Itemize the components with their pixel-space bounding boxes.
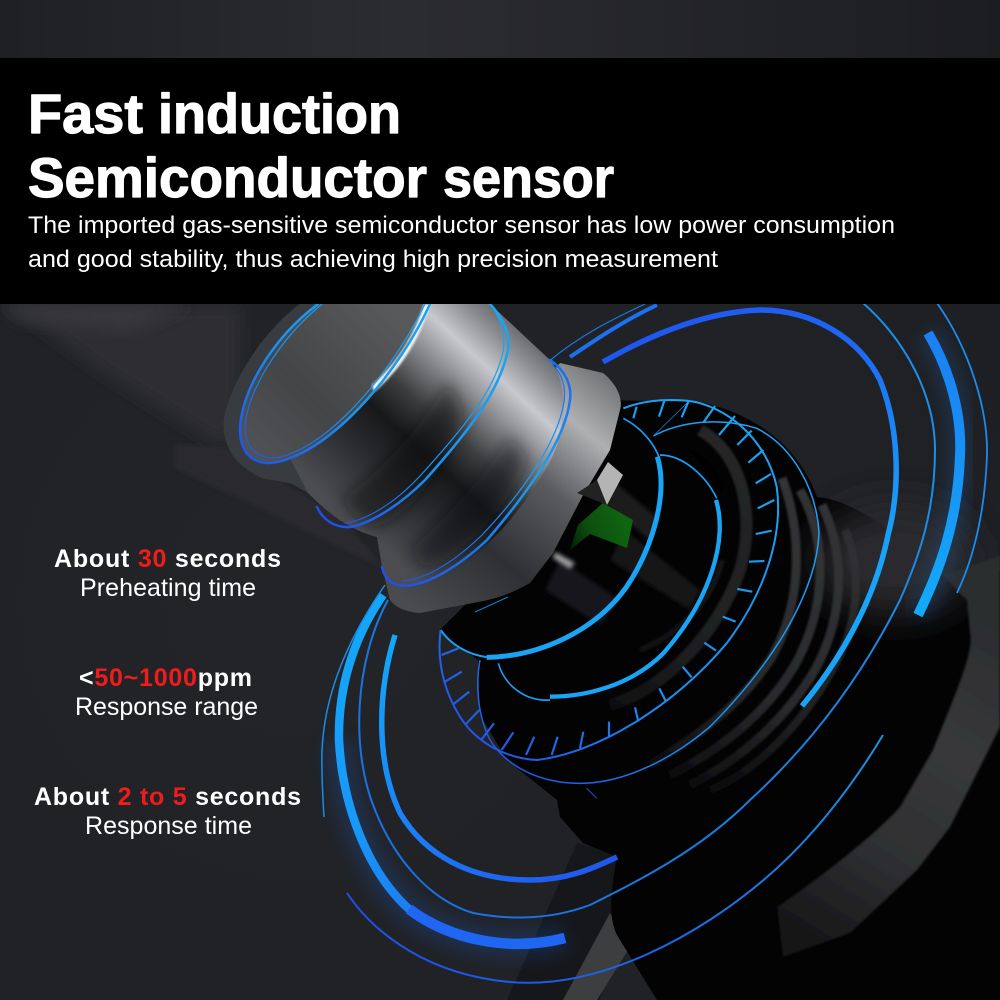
arc long bottom bbox=[347, 735, 883, 983]
main cylinder bbox=[224, 304, 564, 586]
spec: response time bbox=[34, 783, 301, 840]
arc lower thick bbox=[339, 595, 410, 910]
blue housing rings bbox=[240, 304, 570, 586]
translucent left rim bbox=[224, 304, 318, 493]
white rim highlight bbox=[372, 304, 430, 392]
description: The imported gas-sensitive semiconductor sensor has low power consumption bbox=[28, 212, 895, 239]
collar bbox=[382, 363, 621, 613]
arc lower thin left bbox=[322, 585, 385, 817]
ring 3 bbox=[382, 360, 570, 586]
small scan line bbox=[475, 597, 508, 612]
green circuit board bbox=[570, 503, 633, 550]
glow: lower thick arc bbox=[339, 740, 565, 944]
spec: response range bbox=[75, 664, 258, 721]
title: Fast bbox=[28, 82, 143, 145]
spec: preheating time: Preheating time bbox=[80, 574, 256, 602]
arc upper thick short bbox=[570, 305, 657, 357]
title: sensor bbox=[443, 146, 614, 209]
ring 1 bbox=[240, 304, 430, 463]
black title banner bbox=[0, 58, 1000, 304]
title bbox=[28, 82, 614, 209]
shaded lobes bbox=[340, 380, 465, 528]
long thin spiral bbox=[359, 303, 935, 918]
front face bbox=[240, 304, 430, 463]
title: induction bbox=[158, 82, 401, 145]
spec: response time: About 2 to 5 seconds bbox=[34, 783, 301, 811]
hex nut bbox=[577, 462, 623, 505]
metal sensor housing bbox=[224, 304, 623, 613]
ring 2 bbox=[317, 304, 508, 527]
rubber band around the dome bbox=[777, 556, 1000, 957]
arc right thick bbox=[918, 333, 960, 615]
threaded sensor rings bbox=[610, 430, 856, 790]
arc right thin bbox=[937, 303, 987, 593]
arc B bbox=[660, 455, 717, 498]
arc upper big bbox=[603, 310, 896, 706]
spec: preheating time: About 30 seconds bbox=[54, 545, 281, 573]
arc A thick bbox=[623, 418, 660, 460]
dial outer bbox=[440, 400, 778, 760]
spec: response range: Response range bbox=[75, 693, 258, 721]
dial rings and ticks bbox=[440, 400, 819, 798]
spec: preheating time bbox=[54, 545, 281, 602]
ticks bbox=[442, 401, 774, 755]
description bbox=[28, 212, 895, 273]
description: and good stability, thus achieving high precision measurement bbox=[28, 246, 718, 273]
sensor base dome and black body bbox=[440, 400, 1000, 1000]
spec: response range: <50~1000ppm bbox=[79, 664, 252, 692]
glow: right thick arc bbox=[918, 333, 960, 615]
large blue wave arcs bbox=[322, 303, 987, 983]
spec: response time: Response time bbox=[85, 812, 252, 840]
arc lower inner bbox=[382, 635, 617, 880]
highlight on metal pin bbox=[553, 552, 575, 569]
arc C bbox=[478, 422, 819, 783]
grey cable bbox=[507, 843, 640, 1000]
title: Semiconductor bbox=[28, 146, 427, 209]
dark inner detail bbox=[545, 448, 722, 625]
